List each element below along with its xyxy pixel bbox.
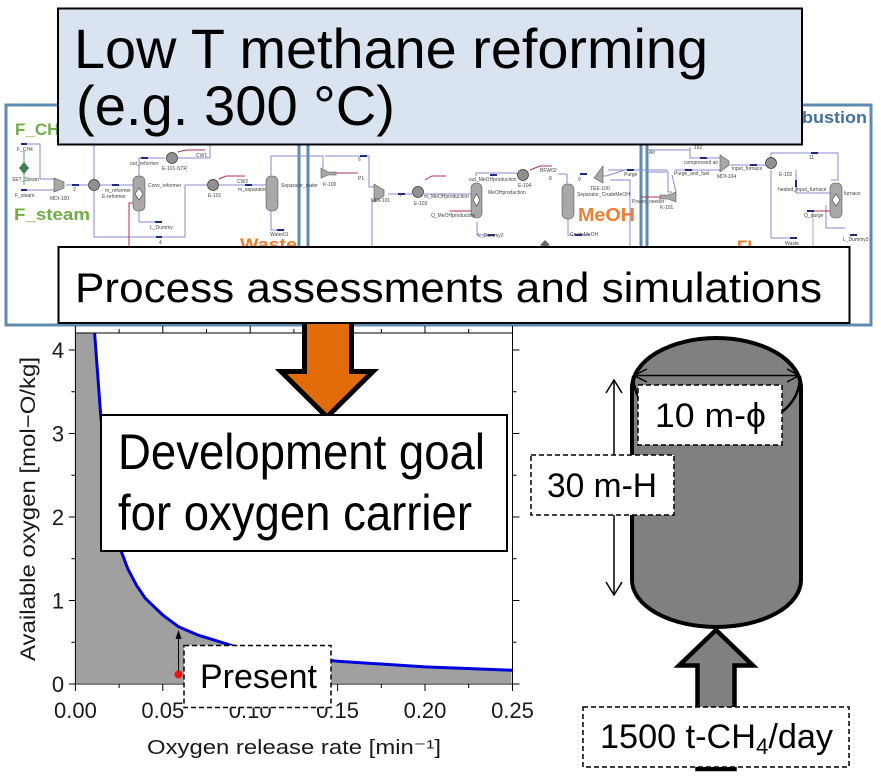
arrow: improvement from present to goal — [176, 630, 182, 671]
flowsheet section: methanol synthesis: P1 — [358, 176, 364, 182]
flowsheet section: methanol synthesis: 7 — [399, 193, 402, 199]
flowsheet section: reforming: m_separator — [238, 187, 266, 193]
flowsheet section: reforming: L_Dummy — [150, 225, 173, 231]
flowsheet section: methanol synthesis: MDI-101 — [371, 198, 390, 204]
chart: available oxygen vs oxygen release rate — [17, 326, 534, 759]
label: F_CH4 feed: F_CH4 — [15, 120, 69, 139]
title box — [58, 8, 802, 144]
flowsheet section: combustion: K-101 — [660, 205, 674, 211]
flowsheet section: methanol synthesis: E-103 — [414, 201, 428, 207]
x axis label: Oxygen release rate [min⁻¹] — [147, 737, 441, 759]
label: methane feed rate: 1500 t-CH — [600, 718, 755, 756]
x tick labels: 0.10 — [229, 698, 272, 723]
flowsheet section: combustion: Purge_and_fuel — [674, 171, 709, 177]
flowsheet section: reforming: 2 — [73, 187, 76, 193]
flowsheet section: methanol synthesis: MeOHproduction — [488, 190, 526, 196]
flowsheet section: reforming: Water01 — [270, 232, 289, 238]
callout: development goal: for oxygen carrier — [118, 485, 472, 541]
y tick labels: 2 — [52, 505, 64, 530]
x tick labels — [54, 698, 534, 723]
y tick labels: 0 — [52, 672, 64, 697]
label: diameter: 10 m-ϕ — [655, 397, 766, 435]
chart area fill — [75, 333, 512, 683]
flowsheet section: combustion: heated_input_furnace — [778, 187, 827, 193]
label: fuel fragment: FI — [737, 237, 752, 256]
arrow: height — [606, 380, 622, 595]
arrow: process assessments to goal — [281, 300, 373, 417]
chart frame and ticks — [69, 326, 520, 691]
flowsheet section: methanol synthesis: 9 — [578, 177, 581, 183]
flowsheet section: combustion: Air — [649, 150, 655, 156]
heading box: process assessments: Process assessments and simulations — [75, 264, 822, 311]
x tick labels: 0.25 — [491, 698, 534, 723]
flowsheet section: reforming: Conv_reformer — [148, 183, 182, 189]
y tick labels: 3 — [52, 422, 64, 446]
icon: reactor vessel — [632, 338, 801, 627]
flowsheet section: methanol synthesis: m_MeOHproduction — [424, 194, 469, 200]
flowsheet section: reforming: CW1 — [196, 153, 207, 159]
label: methane feed rate: /day — [768, 718, 833, 756]
x tick labels: 0.15 — [316, 698, 359, 723]
y tick labels: 1 — [52, 588, 64, 614]
flowsheet section: reforming: MDI-100 — [50, 196, 69, 202]
flowsheet section: combustion — [642, 145, 869, 247]
label: Waste: Waste — [240, 235, 297, 254]
marker: present point — [174, 670, 182, 678]
title box: (e.g. 300 °C) — [76, 74, 395, 137]
flowsheet section: combustion: Waste — [785, 241, 799, 247]
label: MeOH: MeOH — [578, 205, 635, 225]
callout: present: Present — [200, 658, 318, 696]
arrow: diameter — [634, 369, 799, 382]
arrow: methane feed — [679, 630, 753, 769]
flowsheet section: methanol synthesis — [323, 155, 668, 247]
flowsheet section: reforming: E-reformer — [102, 194, 126, 200]
label: combustion section: bustion — [802, 108, 867, 127]
flowsheet section: reforming: out_reformer — [130, 161, 159, 167]
flowsheet section: reforming: F_steam — [15, 193, 34, 199]
heading box: process assessments — [58, 247, 850, 323]
x tick labels: 0.05 — [141, 698, 184, 723]
flowsheet section: reforming: Separator_water — [281, 183, 318, 189]
flowsheet section: methanol synthesis: 8 — [549, 176, 552, 182]
y axis label: Available oxygen [mol−O/kg] — [17, 357, 40, 661]
flowsheet section: methanol synthesis: Purge — [624, 172, 638, 178]
flowsheet section: reforming: SET_Steam — [12, 177, 39, 183]
callout: development goal: Development goal — [118, 424, 485, 480]
flowsheet section: methanol synthesis: CrudeMeOH — [570, 232, 598, 238]
title box: Low T methane reforming — [74, 17, 708, 80]
flowsheet section: reforming: 4 — [159, 240, 162, 246]
y tick labels — [52, 338, 64, 697]
label: methane feed rate: 4 — [756, 734, 768, 759]
flowsheet section: reforming: CW2 — [237, 179, 248, 185]
y tick labels: 4 — [52, 338, 64, 363]
flowsheet section: combustion: compressed air — [684, 160, 719, 166]
panel: process flowsheet — [6, 105, 871, 325]
flowsheet section: methanol synthesis: TEE-100 — [590, 186, 610, 192]
flowsheet section: methanol synthesis: Q_MeOHproduction — [431, 213, 476, 219]
callout: present — [184, 646, 331, 708]
flowsheet section: reforming: E-101-STR — [162, 166, 187, 172]
flowsheet section: methanol synthesis: out_MeOHproduction — [469, 177, 517, 183]
flowsheet section: combustion: furnace — [844, 191, 861, 197]
flowsheet section: reforming: E-101 — [208, 193, 222, 199]
flowsheet section: reforming: F_CH4 — [17, 147, 33, 153]
x tick labels: 0.20 — [404, 698, 446, 723]
flowsheet section: methanol synthesis: BFW02 — [540, 168, 557, 174]
flowsheet section: combustion: L_Dummy3 — [843, 237, 869, 243]
label: diameter — [638, 385, 782, 445]
flowsheet section: combustion: 162 — [694, 145, 703, 151]
flowsheet section: combustion: E-102 — [779, 172, 793, 178]
x tick labels: 0.00 — [54, 698, 97, 723]
flowsheet section: reforming: m_reformer — [105, 188, 131, 194]
flowsheet section: methanol synthesis: Power_needer — [632, 199, 665, 205]
flowsheet section: combustion: 11 — [809, 155, 814, 161]
flowsheet section: methanol synthesis: L_Dummy2 — [478, 233, 504, 239]
flowsheet section: combustion: MDI-104 — [717, 174, 736, 180]
label: F_steam feed: F_steam — [14, 205, 90, 224]
label: height: 30 m-H — [547, 467, 657, 505]
flowsheet section: methanol synthesis: Separator_CrudeMeOH — [577, 192, 630, 198]
label: height — [531, 455, 674, 515]
flowsheet section: combustion: Q_purge — [804, 213, 824, 219]
curve: oxygen requirement — [95, 333, 512, 670]
label: methane feed rate — [583, 707, 849, 767]
callout: development goal — [101, 415, 507, 551]
flowsheet section: combustion: input_furnace — [732, 166, 763, 172]
flowsheet section: methanol synthesis: E-104 — [518, 183, 532, 189]
flowsheet section: reforming — [12, 143, 358, 247]
flowsheet section: methanol synthesis: 6 — [358, 157, 361, 163]
flowsheet section: methanol synthesis: K-100 — [323, 182, 337, 188]
